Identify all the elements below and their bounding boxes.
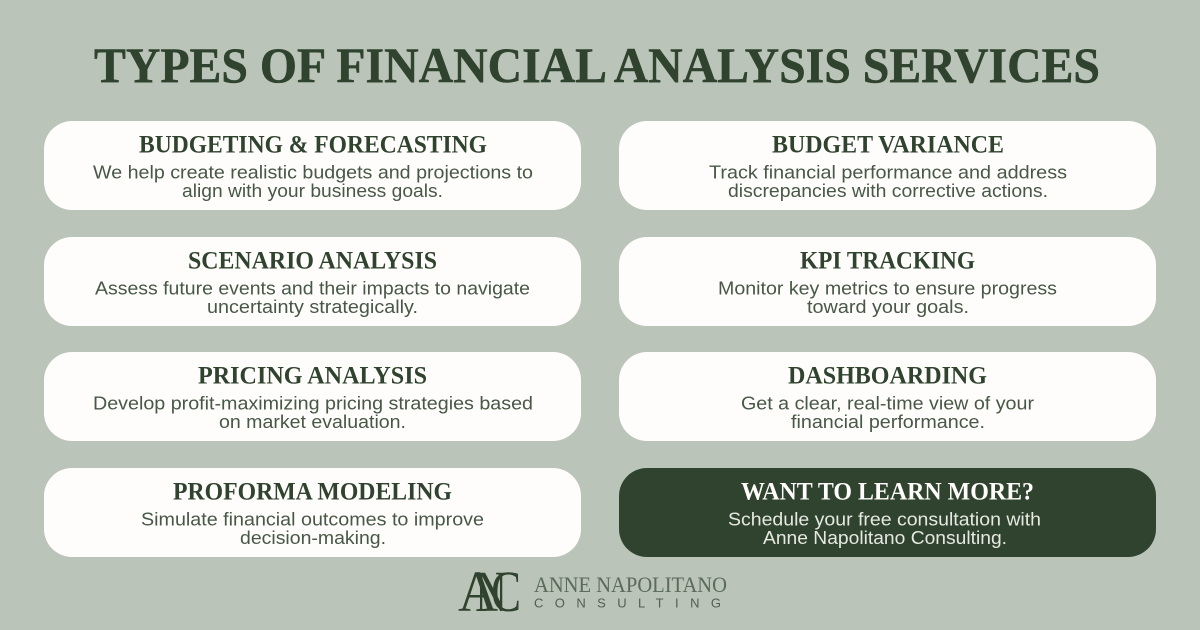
icon: ANC monogram: A <box>458 559 498 624</box>
text: scenario analysis description: uncertainty strategically. <box>207 297 418 317</box>
text: budget variance description: discrepancies with corrective actions. <box>728 181 1048 201</box>
text: proforma modeling description <box>141 510 484 548</box>
text: pricing analysis description <box>93 394 533 432</box>
text: dashboarding description <box>741 394 1034 432</box>
heading: KPI tracking: KPI TRACKING <box>800 248 975 274</box>
panel: proforma modeling <box>44 468 581 557</box>
text: budgeting and forecasting description <box>93 162 533 201</box>
text: budget variance description <box>709 162 1067 201</box>
icon: ANC monogram: N <box>475 559 507 624</box>
text: scenario analysis description <box>95 278 530 317</box>
text: pricing analysis description: Develop profit-maximizing pricing strategies based <box>93 394 533 414</box>
text: Anne Napolitano: ANNE NAPOLITANO <box>534 572 727 597</box>
text: dashboarding description: financial performance. <box>791 412 985 432</box>
text: call to action description: Anne Napolitano Consulting. <box>763 528 1007 548</box>
text: call to action description: Schedule your free consultation with <box>728 510 1041 530</box>
text: budgeting and forecasting description: align with your business goals. <box>182 181 443 201</box>
text: KPI tracking description: toward your goals. <box>807 297 969 317</box>
text: pricing analysis description: on market evaluation. <box>219 412 406 432</box>
text: Consulting: CONSULTING <box>534 596 721 610</box>
panel: KPI tracking <box>619 237 1156 326</box>
heading: pricing analysis: PRICING ANALYSIS <box>198 362 427 390</box>
text: budget variance description: Track financial performance and address <box>709 162 1067 182</box>
panel: budgeting and forecasting <box>44 121 581 210</box>
heading: dashboarding: DASHBOARDING <box>788 362 987 390</box>
heading: scenario analysis: SCENARIO ANALYSIS <box>188 248 437 274</box>
title: TYPES OF FINANCIAL ANALYSIS SERVICES <box>94 37 1100 93</box>
panel: dashboarding <box>619 352 1156 441</box>
icon: ANC monogram: C <box>491 559 521 624</box>
text: call to action description <box>728 510 1041 548</box>
text: KPI tracking description <box>718 278 1057 317</box>
text: KPI tracking description: Monitor key metrics to ensure progress <box>718 278 1057 298</box>
icon: ANC monogram <box>458 559 521 624</box>
logo: Anne Napolitano Consulting <box>458 559 727 624</box>
panel: scenario analysis <box>44 237 581 326</box>
panel: call to action <box>619 468 1156 557</box>
text: proforma modeling description: decision-making. <box>240 528 386 548</box>
text: dashboarding description: Get a clear, real-time view of your <box>741 394 1034 414</box>
heading: budgeting and forecasting: BUDGETING & FORECASTING <box>139 132 487 158</box>
text: proforma modeling description: Simulate financial outcomes to improve <box>141 510 484 530</box>
heading: budget variance: BUDGET VARIANCE <box>772 132 1004 158</box>
text: budgeting and forecasting description: We help create realistic budgets and projections to <box>93 162 533 182</box>
heading: want to learn more: WANT TO LEARN MORE? <box>741 478 1034 506</box>
heading: proforma modeling: PROFORMA MODELING <box>173 478 452 506</box>
text: scenario analysis description: Assess future events and their impacts to navigate <box>95 278 530 298</box>
panel: pricing analysis <box>44 352 581 441</box>
panel: budget variance <box>619 121 1156 210</box>
